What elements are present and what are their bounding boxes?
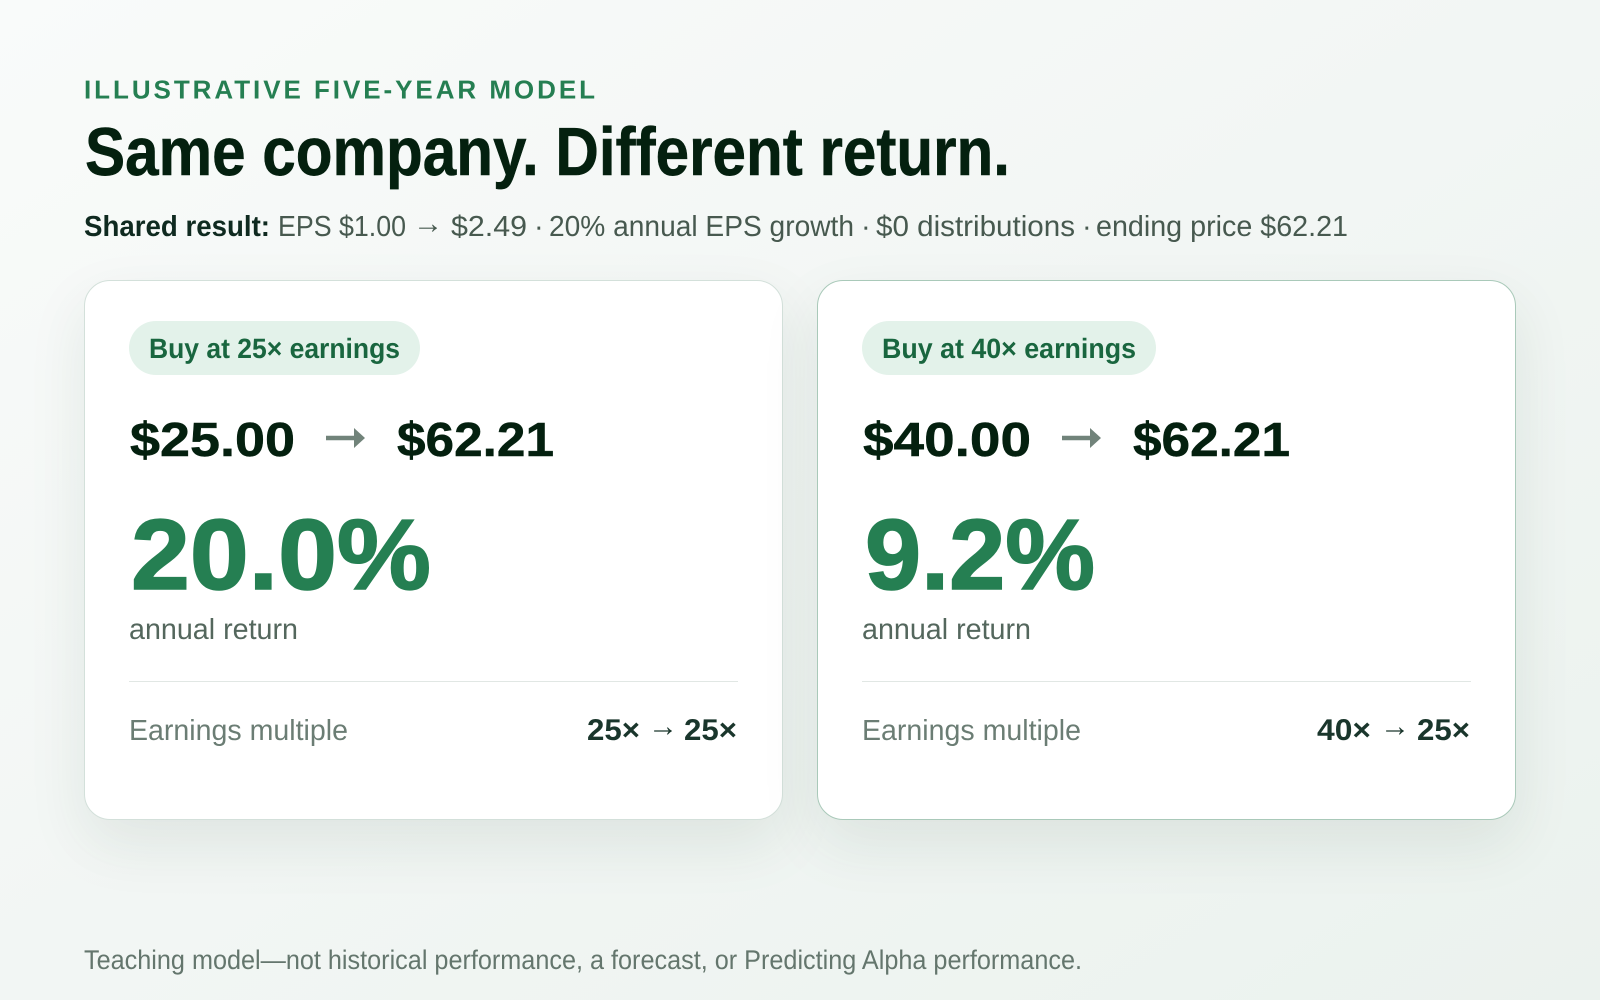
eyebrow: ILLUSTRATIVE FIVE-YEAR MODEL: [84, 74, 595, 104]
badge: buy at 25x: [129, 321, 420, 375]
shared result summary: →: [413, 208, 443, 240]
shared result summary: [84, 208, 1348, 243]
earnings multiple row: [862, 710, 1470, 747]
earnings multiple row: [129, 710, 737, 747]
shared result summary: ending price $62.21: [1096, 211, 1348, 243]
price path: [130, 414, 554, 467]
price path: $62.21: [1133, 414, 1290, 467]
arrow: [326, 428, 365, 448]
earnings multiple row: →: [648, 710, 678, 743]
badge: buy at 40x: Buy at 40× earnings: [882, 333, 1136, 364]
shared result summary: EPS $1.00: [278, 211, 406, 243]
badge: buy at 40x: [862, 321, 1156, 375]
earnings multiple row: 25×: [1417, 714, 1470, 747]
badge: buy at 25x: Buy at 25× earnings: [149, 333, 400, 364]
annual return label: annual return: [862, 614, 1031, 646]
arrow: [1062, 428, 1101, 448]
price path: $62.21: [397, 414, 554, 467]
annual return value: 9.2%: [865, 499, 1095, 611]
shared result summary: 20% annual EPS growth: [549, 211, 854, 243]
panel: buy at 40x earnings: [817, 280, 1516, 820]
earnings multiple row: 40×: [1317, 714, 1371, 747]
earnings multiple row: Earnings multiple: [862, 715, 1081, 747]
header: [84, 74, 1348, 243]
shared result summary: ·: [534, 211, 544, 243]
annual return value: 20.0%: [131, 499, 431, 611]
earnings multiple row: Earnings multiple: [129, 715, 348, 747]
earnings multiple row: →: [1380, 710, 1410, 743]
panel: buy at 25x earnings: [84, 280, 783, 820]
earnings multiple row: 25×: [684, 714, 737, 747]
price path: $40.00: [863, 414, 1031, 467]
title: Same company. Different return.: [85, 114, 1010, 190]
shared result summary: ·: [861, 211, 871, 243]
shared result summary: $2.49: [451, 211, 527, 243]
earnings multiple row: 25×: [587, 714, 640, 747]
footer note: Teaching model—not historical performance, a forecast, or Predicting Alpha performance.: [84, 945, 1082, 975]
price path: $25.00: [130, 414, 295, 467]
price path: [863, 414, 1290, 467]
shared result summary: Shared result:: [84, 211, 270, 243]
annual return label: annual return: [129, 614, 298, 646]
shared result summary: ·: [1082, 211, 1092, 243]
shared result summary: $0 distributions: [876, 211, 1075, 243]
